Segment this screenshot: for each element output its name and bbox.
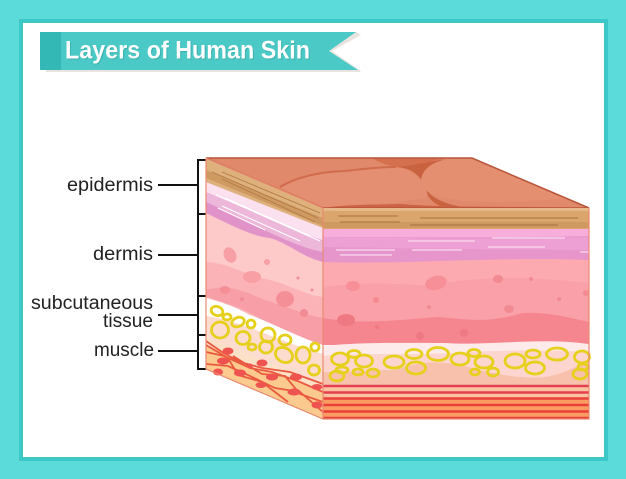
left face: tan epidermis layer [206,159,323,228]
left face: dermis [206,210,323,346]
top face [206,158,589,208]
front face: tan epidermis layer [323,208,589,229]
layer labels [31,175,154,361]
labels with bracket [31,160,206,369]
left face: muscle [206,337,323,419]
cube edges [206,158,589,419]
title text: Layers of Human Skin [66,38,311,66]
layer labels: muscle [94,340,154,361]
fat cells [210,305,590,381]
skin cube [206,158,590,419]
layer labels: dermis [93,244,153,265]
left face: pink upper dermis layer [206,182,323,262]
layer labels: subcutaneous [31,293,153,314]
layer labels: epidermis [67,175,153,196]
front face: muscle stripes [323,385,589,419]
front face: dermis layer [323,259,589,345]
front face: fat layer [323,341,589,386]
title banner [40,32,361,72]
bracket [158,160,206,369]
layer labels: tissue [103,311,153,332]
front face: pink upper dermis layer [323,229,589,263]
title text: Layers of Human Skin [65,36,310,64]
left face: fat [206,298,323,386]
